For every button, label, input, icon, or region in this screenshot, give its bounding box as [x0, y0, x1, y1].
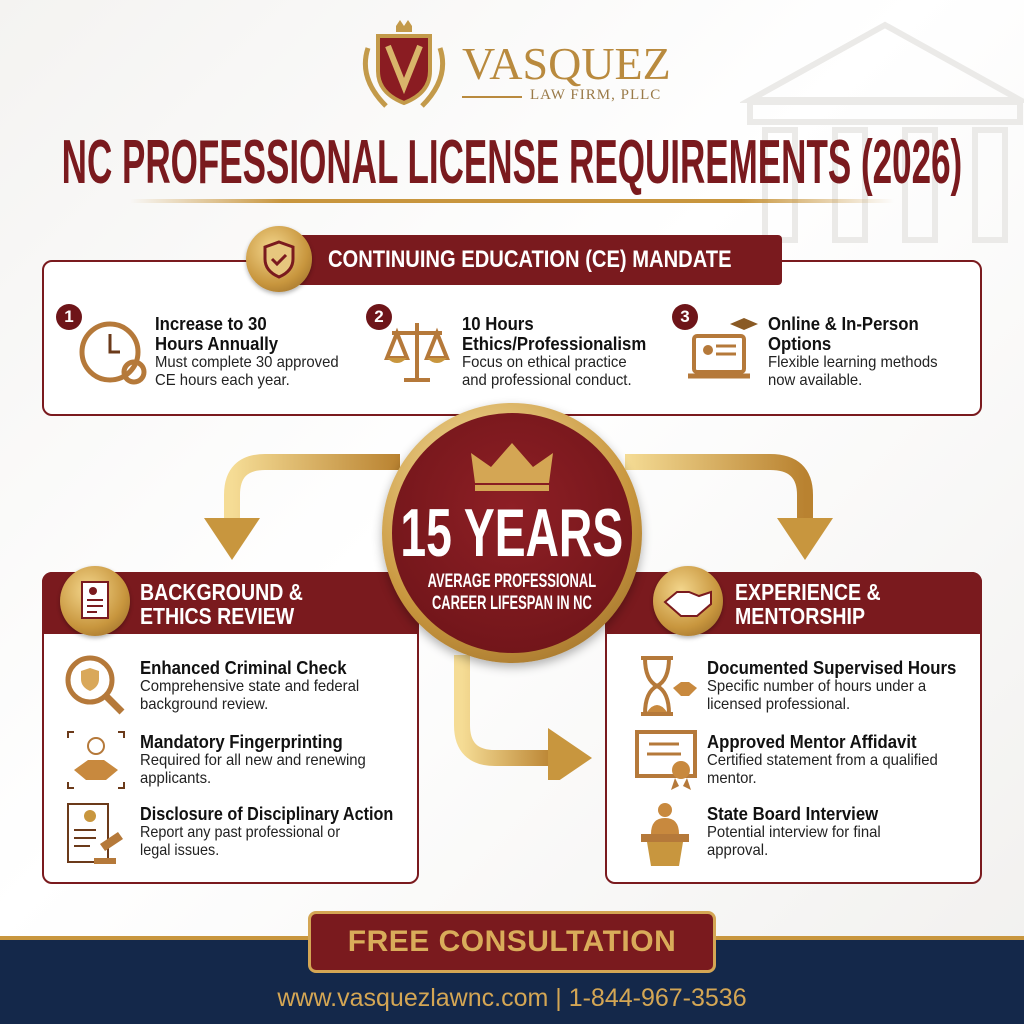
- item: disclosure: Report any past professional or: [140, 824, 340, 841]
- item 1: [56, 304, 339, 389]
- center stat circle: [382, 403, 642, 663]
- arrows: [204, 454, 833, 780]
- panel: background & ethics: ETHICS REVIEW: [140, 603, 294, 629]
- item: board interview: Potential interview for final: [707, 824, 881, 841]
- arrow: right: [625, 462, 833, 560]
- item: mentor affidavit: Certified statement from a qualified: [707, 752, 938, 769]
- wordmark: VASQUEZ: [462, 38, 671, 89]
- icon: crown: [471, 443, 553, 491]
- heading: CE mandate banner: [244, 226, 782, 296]
- heading: CE mandate banner: CONTINUING EDUCATION (CE) MANDATE: [328, 246, 732, 273]
- icon: crest: [362, 20, 446, 108]
- item: mentor affidavit: [635, 730, 938, 790]
- arrow: center down-right: [462, 655, 592, 788]
- panel: background & ethics: BACKGROUND &: [140, 579, 303, 605]
- button: free consultation: [308, 911, 716, 973]
- item 2: Focus on ethical practice: [462, 354, 627, 371]
- item: supervised hours: Documented Supervised Hours: [707, 658, 956, 678]
- item: supervised hours: licensed professional.: [707, 696, 850, 713]
- item: mentor affidavit: Approved Mentor Affidavit: [707, 732, 917, 752]
- arrow: left: [204, 462, 400, 560]
- item: fingerprinting: applicants.: [140, 770, 211, 787]
- item: supervised hours: [641, 656, 956, 716]
- footer: [0, 936, 1024, 1024]
- item 1: CE hours each year.: [155, 372, 290, 389]
- stat label: CAREER LIFESPAN IN NC: [432, 593, 592, 614]
- item 1: Hours Annually: [155, 334, 278, 354]
- item: board interview: [641, 803, 881, 866]
- panel: background & ethics: [42, 572, 419, 884]
- item 1: Increase to 30: [155, 314, 267, 334]
- item 3: 3: [680, 307, 690, 326]
- panel: experience & mentorship: [605, 572, 982, 884]
- panel: experience & mentorship: EXPERIENCE &: [735, 579, 881, 605]
- item: criminal check: [66, 656, 359, 714]
- stat label: AVERAGE PROFESSIONAL: [428, 571, 596, 592]
- icon: laptop: [688, 318, 758, 378]
- icon: handshake: [653, 566, 723, 636]
- stat: 15 years: 15 YEARS: [401, 495, 623, 571]
- title: NC PROFESSIONAL LICENSE REQUIREMENTS (2026): [62, 128, 962, 197]
- logo: LAW FIRM, PLLC: [530, 87, 661, 103]
- item: board interview: approval.: [707, 842, 768, 859]
- item: criminal check: Comprehensive state and federal: [140, 678, 359, 695]
- item 2: and professional conduct.: [462, 372, 632, 389]
- item: disclosure: [67, 803, 393, 864]
- item: fingerprinting: Required for all new and renewing: [140, 752, 366, 769]
- item 2: [366, 304, 646, 389]
- item 3: Flexible learning methods: [768, 354, 938, 371]
- item: disclosure: legal issues.: [140, 842, 219, 859]
- item: supervised hours: Specific number of hours under a: [707, 678, 926, 695]
- item 1: 1: [64, 307, 74, 326]
- contact text: www.vasquezlawnc.com | 1-844-967-3536: [277, 984, 747, 1012]
- item 3: Online & In-Person: [768, 314, 919, 334]
- icon: document: [60, 566, 130, 636]
- item 2: Ethics/Professionalism: [462, 334, 646, 354]
- icon: clock: [80, 322, 146, 384]
- item 3: [672, 304, 938, 389]
- panel: CE mandate: [42, 260, 982, 416]
- item: mentor affidavit: mentor.: [707, 770, 757, 787]
- icon: shield: [246, 226, 312, 292]
- item: criminal check: Enhanced Criminal Check: [140, 658, 347, 678]
- item 2: 2: [374, 307, 384, 326]
- item 3: Options: [768, 334, 831, 354]
- item: criminal check: background review.: [140, 696, 268, 713]
- item 2: 10 Hours: [462, 314, 534, 334]
- stat label: [428, 571, 596, 614]
- item 1: Must complete 30 approved: [155, 354, 339, 371]
- item: fingerprinting: Mandatory Fingerprinting: [140, 732, 343, 752]
- icon: scales: [384, 323, 450, 382]
- logo: [362, 20, 671, 108]
- item 3: now available.: [768, 372, 862, 389]
- item: disclosure: Disclosure of Disciplinary Action: [140, 804, 393, 824]
- background decoration: courthouse: [740, 22, 1024, 243]
- item: fingerprinting: [67, 731, 366, 789]
- item: board interview: State Board Interview: [707, 804, 878, 824]
- panel: experience & mentorship: MENTORSHIP: [735, 603, 865, 629]
- button: free consultation: FREE CONSULTATION: [348, 925, 676, 958]
